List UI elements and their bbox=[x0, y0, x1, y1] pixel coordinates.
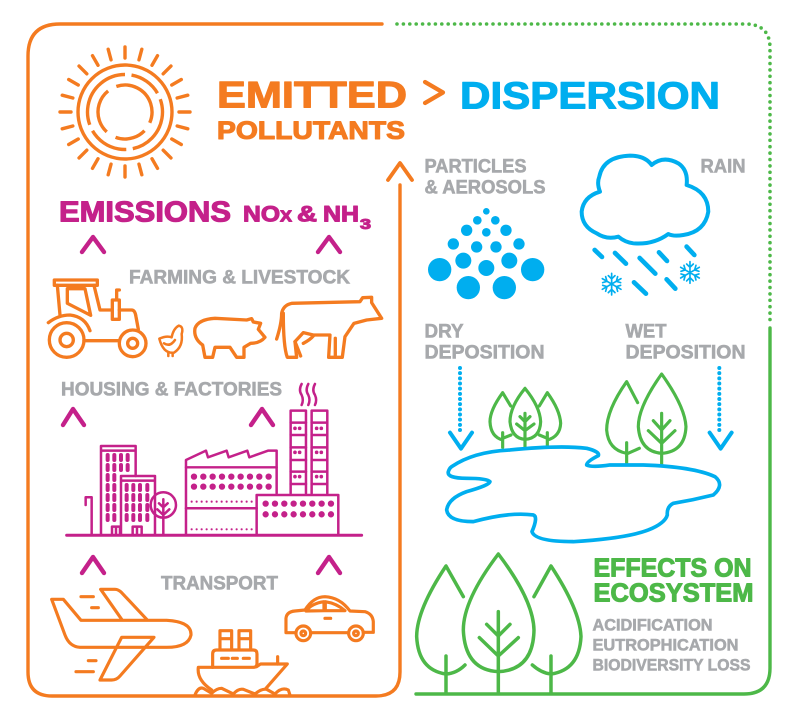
label: wet deposition: DEPOSITION bbox=[626, 342, 746, 364]
heading: emissions: 3 bbox=[360, 216, 371, 233]
heading: emissions: NO bbox=[243, 202, 280, 226]
icon: tractor bbox=[48, 280, 146, 357]
icon: lake bbox=[447, 447, 720, 542]
heading: emissions: & bbox=[297, 202, 317, 226]
heading: effects on ecosystem: EFFECTS ON bbox=[594, 554, 752, 582]
label: particles and aerosols bbox=[424, 156, 546, 198]
icon: small trees bbox=[490, 388, 561, 447]
icon: cow bbox=[277, 297, 382, 357]
icon: car bbox=[286, 597, 373, 641]
title: dispersion: DISPERSION bbox=[460, 76, 720, 118]
icon: sun bbox=[60, 47, 190, 177]
arrows: emissions up chevrons bbox=[82, 237, 340, 252]
icon: medium trees bbox=[607, 374, 686, 464]
title: emitted pollutants: POLLUTANTS bbox=[217, 117, 405, 145]
icon: cloud with rain and snow bbox=[582, 156, 708, 295]
green border dotted and solid bbox=[397, 24, 770, 694]
icon: ship bbox=[195, 631, 290, 695]
label: wet deposition bbox=[626, 322, 746, 364]
label: dry deposition: DEPOSITION bbox=[424, 342, 544, 364]
label: rain: RAIN bbox=[700, 156, 746, 178]
text block: ecosystem effects: EUTROPHICATION bbox=[592, 636, 738, 654]
label: housing and factories: HOUSING & FACTORIES bbox=[61, 380, 282, 400]
text block: ecosystem effects bbox=[592, 616, 750, 674]
label: particles and aerosols: & AEROSOLS bbox=[424, 178, 546, 198]
arrows: housing up chevrons bbox=[63, 409, 273, 425]
icon: particles bbox=[428, 208, 544, 299]
icon: pig bbox=[195, 318, 265, 357]
arrow: dry deposition bbox=[450, 368, 472, 449]
title: emitted pollutants bbox=[217, 74, 407, 145]
icon: chicken bbox=[159, 326, 182, 356]
icon: city and factory bbox=[67, 384, 362, 535]
label: wet deposition: WET bbox=[626, 322, 667, 342]
heading: emissions: NH bbox=[323, 202, 359, 226]
text block: ecosystem effects: BIODIVERSITY LOSS bbox=[592, 656, 750, 674]
arrow: title chevron bbox=[425, 82, 443, 103]
orange border with arrow bbox=[28, 24, 412, 696]
arrows: transport up chevrons bbox=[82, 557, 340, 573]
heading: emissions: EMISSIONS bbox=[59, 196, 231, 228]
heading: effects on ecosystem: ECOSYSTEM bbox=[594, 580, 754, 608]
icon: large trees bbox=[417, 554, 581, 693]
title: emitted pollutants: EMITTED bbox=[217, 74, 407, 116]
heading: effects on ecosystem bbox=[594, 554, 754, 608]
label: transport: TRANSPORT bbox=[161, 574, 278, 594]
label: dry deposition: DRY bbox=[424, 322, 464, 342]
label: dry deposition bbox=[424, 322, 544, 364]
heading: emissions: X bbox=[280, 208, 293, 226]
label: farming and livestock: FARMING & LIVESTOCK bbox=[129, 268, 350, 288]
heading: emissions bbox=[59, 196, 371, 233]
text block: ecosystem effects: ACIDIFICATION bbox=[592, 616, 712, 634]
label: particles and aerosols: PARTICLES bbox=[424, 156, 526, 178]
arrow: wet deposition bbox=[710, 368, 732, 449]
icon: airplane bbox=[52, 589, 191, 680]
